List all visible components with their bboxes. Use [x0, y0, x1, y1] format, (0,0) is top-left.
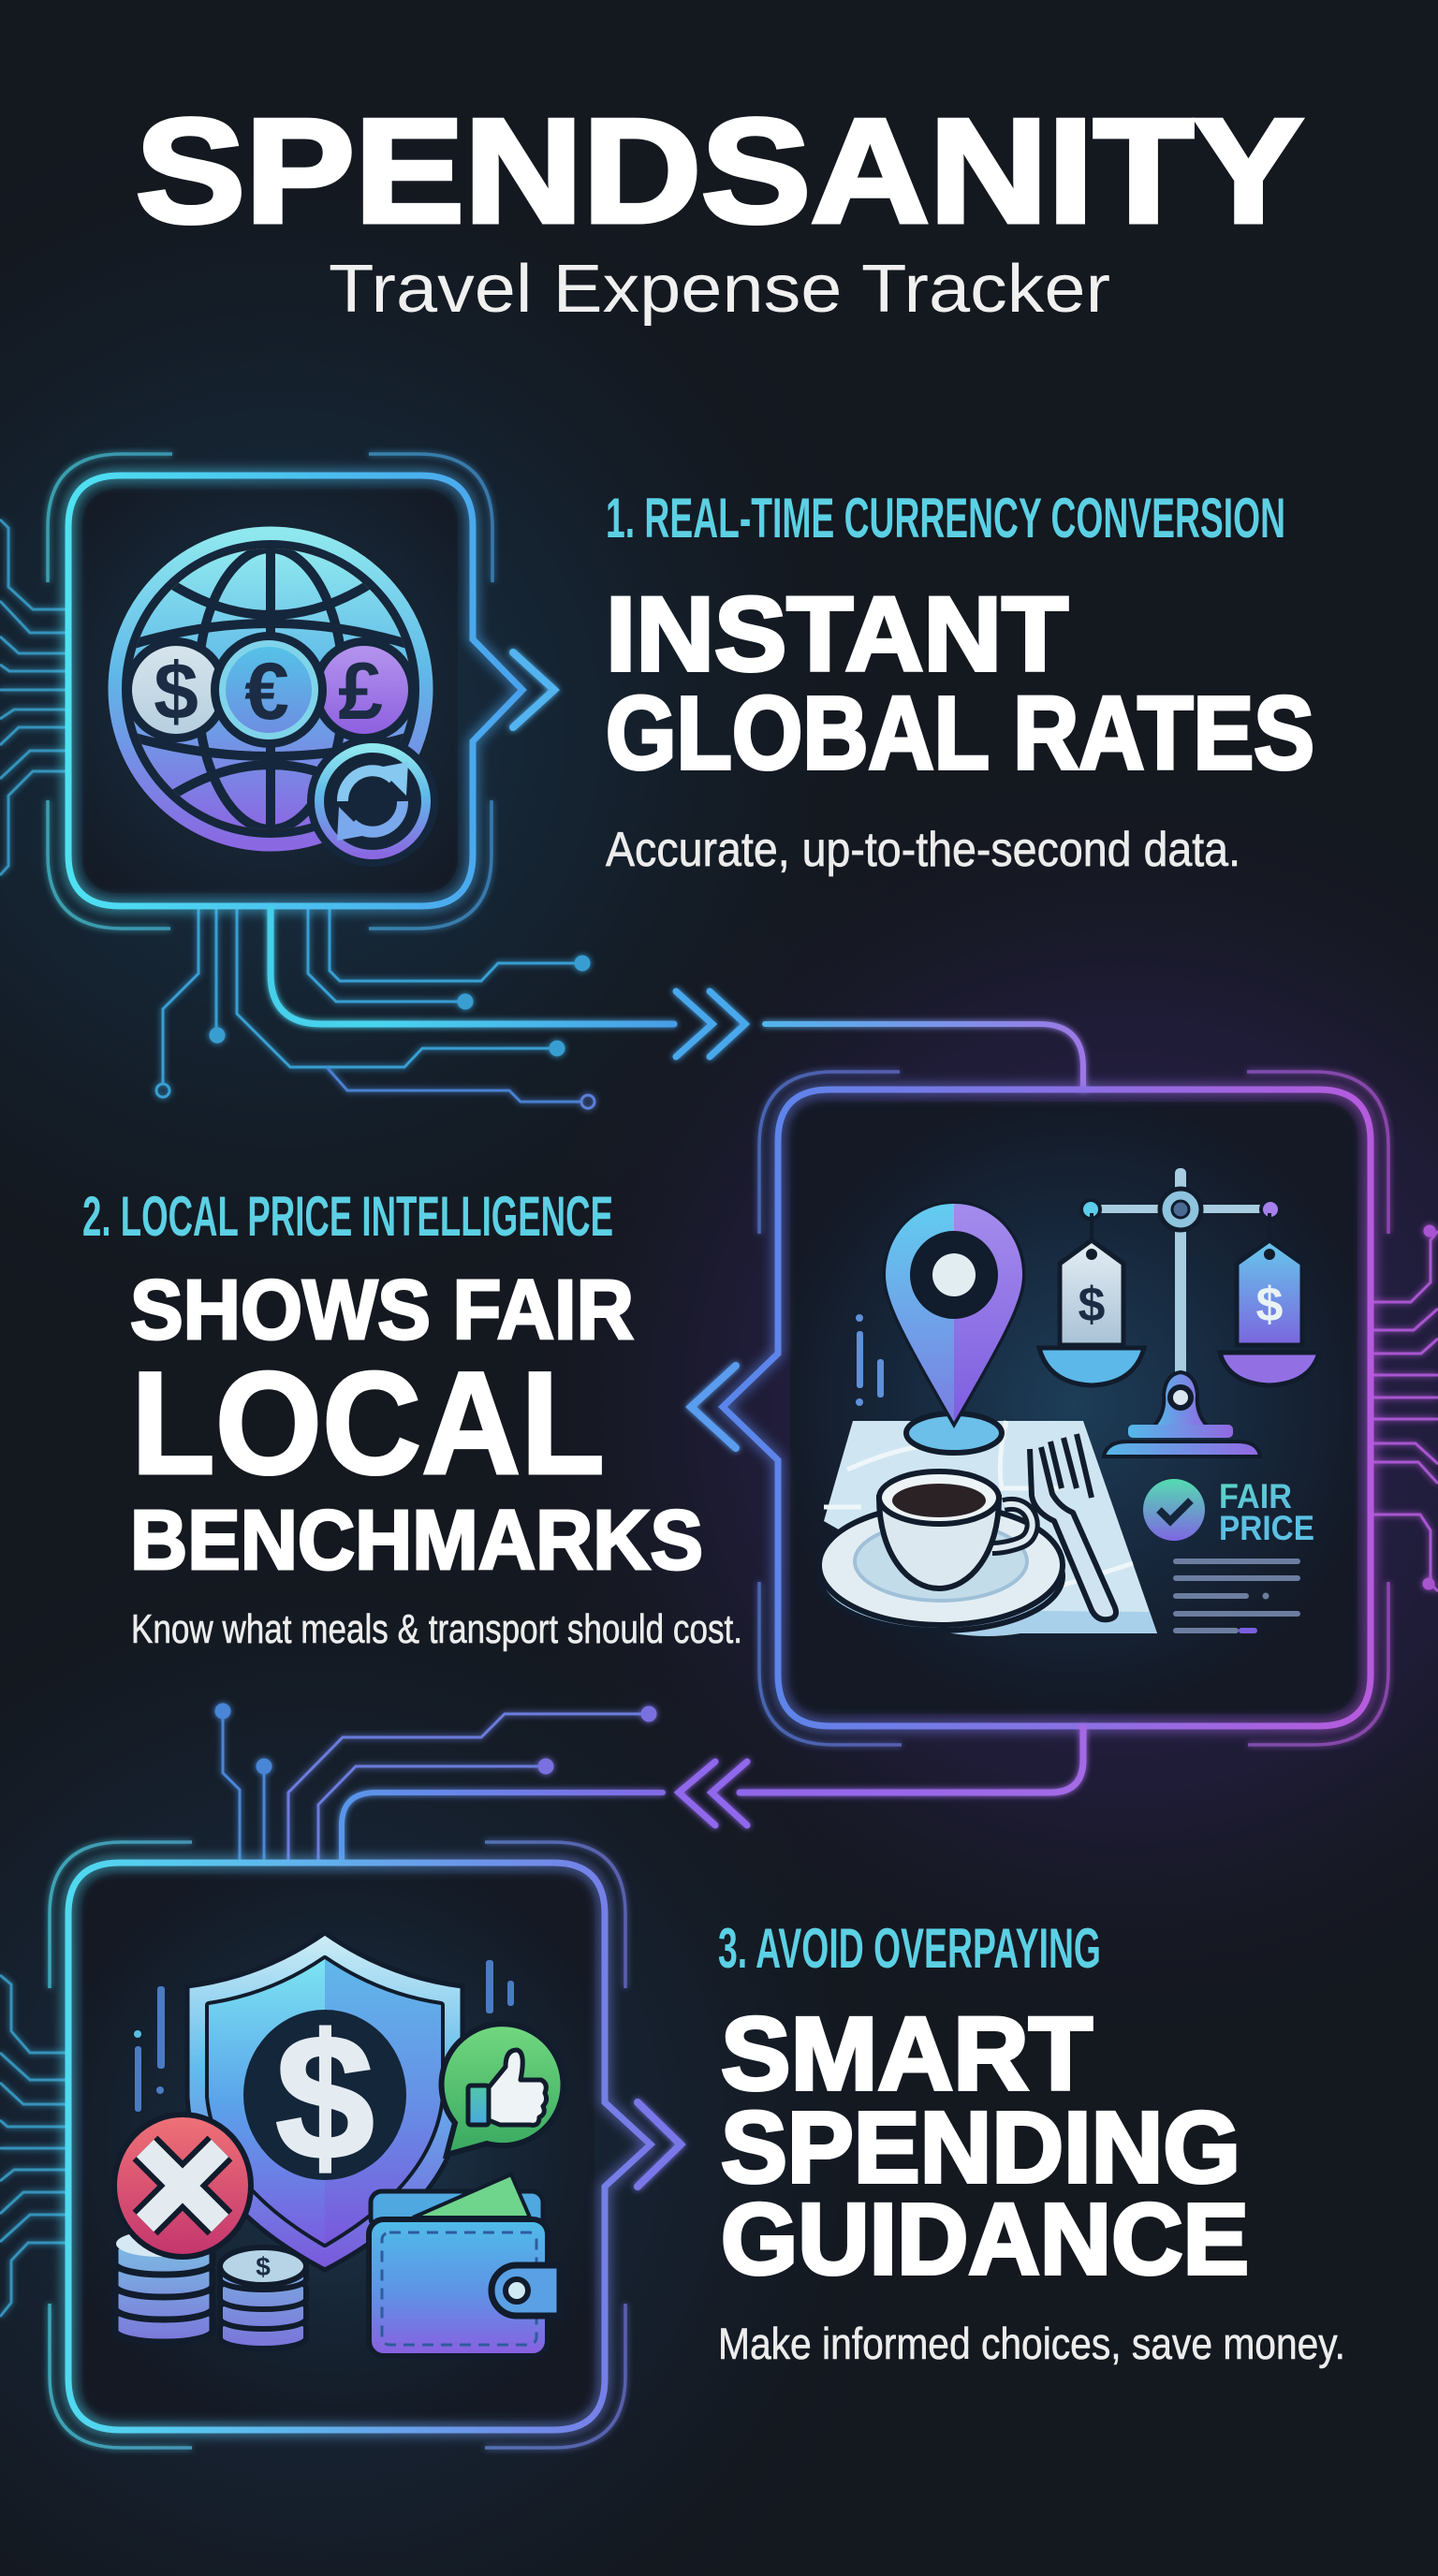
subtitle: Travel Expense Tracker: [329, 252, 1110, 327]
coin: euro: [211, 632, 327, 748]
icon: globe with currencies: [115, 534, 438, 867]
panel: instant global rates icon: [0, 454, 594, 1108]
scale post and base: [1104, 1168, 1260, 1456]
section 2 text: [82, 1185, 742, 1652]
check circle: [1143, 1479, 1205, 1541]
icon: location pin: [886, 1204, 1022, 1453]
arrow: chevron out of panel 1: [513, 652, 554, 727]
icon: shield with dollar: $: [275, 1998, 374, 2197]
map: [824, 1421, 1157, 1636]
right price tag and pan: $: [1256, 1278, 1284, 1332]
section 3 heading: GUIDANCE: [721, 2182, 1249, 2295]
connector: panel 2 to panel 3: [216, 1705, 1083, 1861]
wallet clasp: [492, 2265, 560, 2316]
icon: balance scale: [1039, 1168, 1319, 1456]
section 3 label: 3. AVOID OVERPAYING: [718, 1917, 1101, 1980]
coin: pound: £: [338, 647, 383, 737]
right price tag and pan: [1220, 1213, 1319, 1385]
panel 3 neon frame with arrow notch: [68, 1863, 651, 2430]
connector: panel 1 to panel 2: [271, 909, 1083, 1090]
outer corner lines of panel 3: [50, 1842, 625, 2448]
outer corner lines of panel 2: [759, 1072, 1388, 1745]
icon: coin stack right: $: [256, 2252, 271, 2281]
panel 1 inner square: [82, 489, 458, 893]
circuit traces below panel 1: [156, 909, 594, 1108]
refresh badge: [307, 736, 438, 867]
icon: wallet: [369, 2174, 560, 2356]
arrow: double chevron: [676, 991, 745, 1057]
outer corner lines of panel 1: [48, 454, 492, 929]
section 3 heading: SMART: [721, 1997, 1093, 2112]
coin: dollar: $: [154, 647, 198, 737]
coin: euro: €: [244, 647, 289, 737]
circuit traces right of panel 2: [1372, 1226, 1438, 1591]
connector line from panel 1: [271, 909, 674, 1024]
wallet body: [369, 2219, 548, 2356]
section 1 heading: INSTANT: [606, 576, 1068, 693]
fair price text line 2: PRICE: [1219, 1509, 1314, 1547]
section 2 label: 2. LOCAL PRICE INTELLIGENCE: [82, 1185, 613, 1248]
connector line into panel 2: [765, 1024, 1083, 1090]
left price tag and pan: $: [1078, 1278, 1106, 1332]
icon: map, cup and fork: [819, 1421, 1157, 1636]
section 2 heading: [130, 1264, 703, 1588]
panel: local benchmarks icon: [691, 1072, 1438, 1745]
coin: dollar: [124, 637, 228, 742]
section 2 heading: SHOWS FAIR: [130, 1264, 634, 1357]
left price tag and pan: [1039, 1213, 1144, 1385]
section 3 text: [718, 1917, 1345, 2368]
panel 1 neon frame with arrow notch: [68, 476, 522, 906]
wallet back: [371, 2191, 543, 2229]
section 2 heading: BENCHMARKS: [130, 1494, 703, 1588]
title: SPENDSANITY: [136, 89, 1303, 254]
circuit traces left of panel 3: [0, 1975, 66, 2317]
saucer: [819, 1505, 1063, 1631]
circuit traces above panel 3: [216, 1705, 655, 1861]
icon: coin stack right: [220, 2247, 306, 2349]
connector line into panel 3: [342, 1793, 663, 1861]
section 1 description: Accurate, up-to-the-second data.: [606, 823, 1240, 877]
decorative signal bars: [134, 1960, 514, 2112]
section 2 heading: LOCAL: [131, 1342, 605, 1505]
section 3 heading: SPENDING: [721, 2090, 1240, 2203]
section 2 description: Know what meals & transport should cost.: [131, 1606, 742, 1652]
fair price text: FAIR: [1219, 1477, 1292, 1515]
section 1 heading: GLOBAL RATES: [606, 676, 1314, 791]
icon: red cross badge: [114, 2115, 251, 2257]
icon: shield with dollar: [187, 1933, 462, 2270]
circuit traces left of panel 1: [0, 520, 66, 875]
connector line from panel 2: [740, 1728, 1083, 1793]
coin: pound: [312, 637, 417, 742]
panel 2 inner square: [790, 1102, 1357, 1714]
icon: coin stack left: [115, 2231, 213, 2342]
section 1 heading: [606, 576, 1314, 791]
section 3 heading: [721, 1997, 1249, 2295]
arrow: chevron out of panel 3: [638, 2102, 681, 2187]
panel: smart spending icon: [0, 1842, 681, 2448]
icon: green thumbs-up bubble: [442, 2024, 564, 2155]
scale beam: [1081, 1189, 1280, 1230]
coffee cup: [879, 1471, 1033, 1588]
receipt lines: [1173, 1559, 1300, 1633]
globe ring and grid: [115, 534, 426, 844]
section 3 description: Make informed choices, save money.: [718, 2319, 1345, 2368]
section 1 text: [606, 487, 1314, 877]
decorative signal bars: [856, 1314, 884, 1406]
fork: [1030, 1434, 1116, 1619]
arrow: chevron out of panel 2: [691, 1366, 736, 1448]
fair price badge: [1143, 1477, 1314, 1633]
panel 2 neon frame with arrow notch: [723, 1090, 1371, 1726]
banknote: [413, 2174, 530, 2217]
panel 3 inner square: [82, 1874, 594, 2421]
arrow: double chevron: [679, 1762, 747, 1825]
